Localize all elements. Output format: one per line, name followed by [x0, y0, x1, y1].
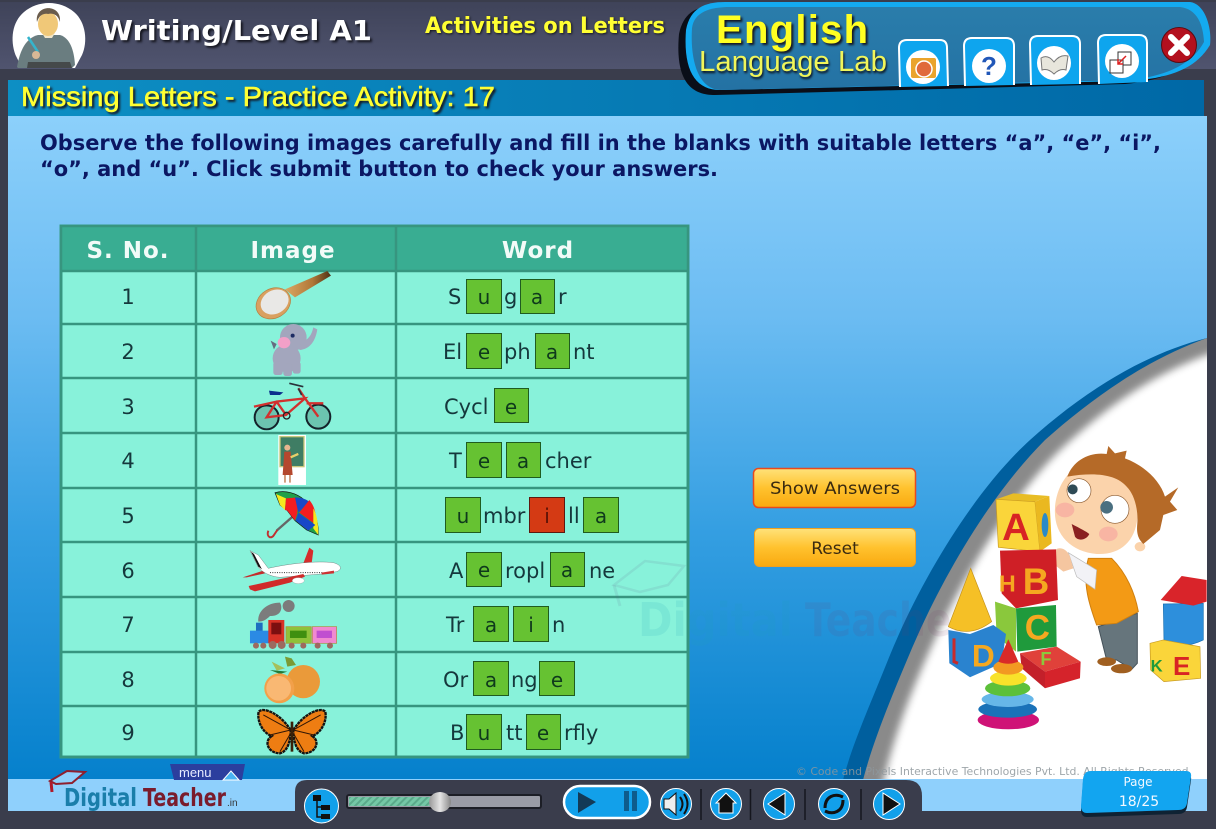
row 5: umbrella: ll	[568, 504, 580, 528]
subheader bar	[8, 80, 1204, 116]
row 1: Sugar: 1	[121, 285, 135, 309]
menu tab: menu	[179, 765, 212, 780]
row 8: Orange: a	[485, 668, 497, 692]
heading: Language Lab: Language Lab	[699, 46, 887, 78]
row 1: Sugar: g	[504, 285, 517, 309]
row 4: Teacher: T	[448, 449, 462, 473]
row 6: Aeroplane: a	[561, 558, 573, 582]
button: Reset	[754, 528, 916, 566]
watermark: Digital Teacher: Teacher	[805, 593, 970, 647]
block A: A	[1002, 506, 1030, 549]
row 6: Aeroplane: ne	[589, 559, 615, 583]
icon: home	[710, 788, 742, 820]
row 8: Orange: 8	[121, 668, 135, 692]
row 1: Sugar	[121, 271, 567, 325]
row 8: Orange: e	[551, 668, 563, 692]
row 6: Aeroplane: A	[449, 559, 464, 583]
panel: main content area	[8, 116, 1207, 780]
watermark: Digital Teacher: Digital	[638, 593, 793, 647]
row 9: Butterfly: u	[478, 721, 490, 745]
row 5: umbrella	[121, 492, 618, 537]
row 2: Elephant: El	[443, 340, 462, 364]
illustration: boy stacking alphabet blocks	[948, 446, 1207, 729]
row 9: Butterfly	[121, 710, 598, 753]
icon: umbrella	[268, 492, 318, 537]
row 9: Butterfly: B	[450, 721, 464, 745]
logo: Digital Teacher: Digital	[64, 783, 137, 812]
table background	[61, 226, 688, 757]
icon: writer avatar	[13, 3, 85, 68]
row 9: Butterfly: rfly	[564, 721, 598, 745]
row 8: Orange: ng	[511, 668, 538, 692]
row 4: Teacher	[121, 435, 592, 485]
button: Show Answers: Show Answers	[770, 479, 900, 499]
row 3: Cycle	[121, 383, 528, 429]
block cone and D: D	[972, 638, 995, 674]
page counter badge: Page	[1123, 775, 1153, 789]
row 4: Teacher: e	[478, 449, 490, 473]
table header row: Image	[250, 238, 336, 264]
decorative white curved area	[843, 338, 1216, 815]
icon: bicycle	[254, 383, 330, 429]
heading: Activities on Letters: Activities on Letters	[425, 14, 665, 39]
icon: sitemap button	[304, 789, 338, 823]
row 5: umbrella: u	[457, 504, 469, 528]
tab: glossary book	[1030, 36, 1080, 85]
icon: aeroplane	[243, 548, 340, 591]
icon: teacher at blackboard	[278, 435, 306, 485]
icon: back arrow	[764, 788, 794, 820]
row 2: Elephant: a	[546, 340, 558, 364]
heading: Missing Letters - Practice Activity 17: Missing Letters - Practice Activity: 17	[21, 81, 495, 112]
top header bar	[0, 2, 1216, 69]
row 2: Elephant: 2	[121, 340, 135, 364]
block B	[999, 549, 1058, 608]
row 7: Train	[121, 600, 565, 649]
row 2: Elephant: nt	[573, 340, 595, 364]
panel body	[686, 2, 1210, 90]
row 4: Teacher: a	[517, 449, 529, 473]
progress slider	[347, 792, 541, 812]
watermark: Digital Teacher	[614, 561, 970, 647]
row 2: Elephant: e	[478, 340, 490, 364]
tab: help	[964, 38, 1014, 86]
control separators	[701, 789, 861, 820]
row 4: Teacher: 4	[121, 449, 135, 473]
logo: Digital Teacher: Teacher	[143, 783, 227, 812]
play and pause control	[564, 786, 650, 818]
page counter badge	[1081, 771, 1191, 817]
page counter badge: 18/25	[1119, 794, 1159, 810]
row 9: Butterfly: 9	[121, 721, 135, 745]
table header row	[61, 226, 688, 271]
icon: speaker	[660, 788, 692, 820]
instructions text	[40, 131, 1161, 181]
row 6: Aeroplane	[121, 548, 615, 591]
blocks K E	[1150, 576, 1207, 682]
boy	[1053, 446, 1178, 673]
icon: train	[250, 600, 337, 649]
title: Writing/Level A1: Writing/Level A1	[101, 14, 372, 47]
block cone and D	[948, 568, 1006, 677]
instructions text: “o”, and “u”. Click submit button to check your answers.	[40, 157, 718, 181]
row 2: Elephant	[121, 324, 595, 376]
heading: English: English	[716, 8, 868, 52]
panel: English Language Lab header	[678, 2, 1210, 95]
row 5: umbrella: 5	[121, 504, 135, 528]
button: close	[1162, 28, 1196, 62]
table header row: S. No.	[86, 238, 170, 264]
row 7: Train: i	[528, 613, 534, 637]
ring pyramid	[978, 639, 1039, 729]
button: Reset: Reset	[811, 539, 859, 559]
row 6: Aeroplane: e	[478, 558, 490, 582]
row 3: Cycle: 3	[121, 395, 135, 419]
block C: C	[1025, 608, 1050, 647]
row 1: Sugar: S	[448, 285, 461, 309]
block F	[1020, 647, 1081, 688]
control bar	[295, 780, 922, 829]
icon: orange	[264, 657, 320, 703]
logo: Digital Teacher	[50, 771, 238, 812]
row 1: Sugar: r	[558, 285, 567, 309]
block C	[995, 602, 1057, 652]
icon: butterfly	[258, 710, 326, 753]
row 7: Train: a	[485, 613, 497, 637]
row 5: umbrella: a	[595, 504, 607, 528]
row 6: Aeroplane: 6	[121, 559, 135, 583]
block B: B	[1023, 561, 1049, 602]
icon: next arrow	[874, 788, 904, 820]
row 8: Orange	[121, 657, 574, 703]
instructions text: Observe the following images carefully and fill in the blanks with suitable letters “a”, “e”, “i”,	[40, 131, 1161, 155]
copyright notice: © Code and Pixels Interactive Technologies Pvt. Ltd. All Rights Reserved.	[796, 765, 1192, 778]
panel shadow	[678, 6, 1204, 95]
row 8: Orange: Or	[443, 668, 469, 692]
row 2: Elephant: ph	[504, 340, 531, 364]
blocks K E: K	[1151, 657, 1163, 676]
table header row: Word	[502, 238, 574, 264]
block B: H	[999, 571, 1016, 597]
menu tab	[170, 764, 245, 780]
row 4: Teacher: cher	[545, 449, 592, 473]
row 5: umbrella: mbr	[483, 504, 526, 528]
table grid lines	[61, 226, 688, 757]
row 9: Butterfly: tt	[506, 721, 522, 745]
icon: elephant	[271, 324, 317, 376]
icon: spoon of sugar	[250, 271, 331, 325]
table: missing letters	[61, 226, 688, 757]
block F: F	[1040, 648, 1052, 669]
row 9: Butterfly: e	[537, 721, 549, 745]
row 1: Sugar: a	[531, 285, 543, 309]
tab: bookmarks	[899, 40, 948, 87]
row 3: Cycle: e	[505, 395, 517, 419]
icon: refresh	[818, 788, 850, 820]
tab: window resize	[1098, 35, 1147, 84]
row 3: Cycle: Cycl	[444, 395, 488, 419]
row 7: Train: Tr	[445, 613, 465, 637]
row 7: Train: n	[552, 613, 565, 637]
row 5: umbrella: i	[544, 504, 550, 528]
logo: Digital Teacher: .in	[227, 798, 238, 809]
row 6: Aeroplane: ropl	[505, 559, 545, 583]
tab: help: ?	[981, 51, 997, 81]
footer light strip	[8, 779, 1207, 811]
block A	[996, 493, 1052, 552]
button: Show Answers	[754, 468, 916, 508]
blocks K E: E	[1173, 651, 1190, 681]
row 7: Train: 7	[121, 613, 135, 637]
row 1: Sugar: u	[478, 285, 490, 309]
